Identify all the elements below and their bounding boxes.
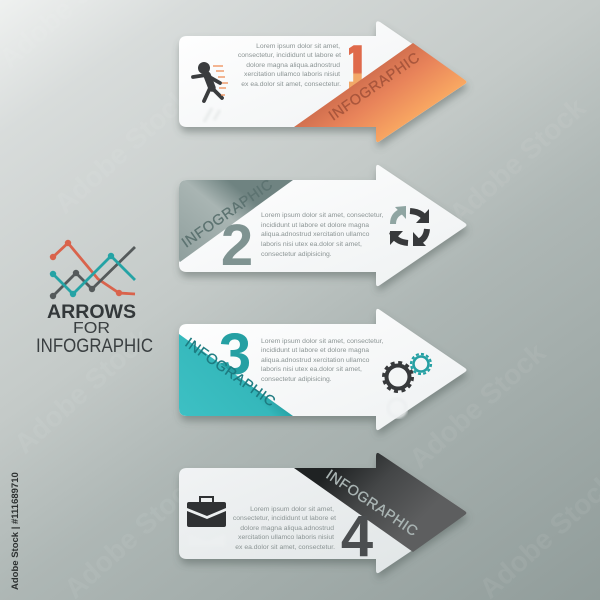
text block: xercitation ullamco laboris nisiut [244, 71, 340, 78]
number 3: 3 [219, 322, 251, 387]
icon: line chart [50, 240, 135, 299]
arrow shape [179, 21, 466, 142]
text block: dolore magna aliqua.adnostrud [240, 525, 334, 532]
logo: arrows for infographic: FOR [73, 320, 110, 337]
text block: Lorem ipsum dolor sit amet, [256, 43, 340, 50]
arrow shape [179, 165, 466, 286]
panel: arrow 2 [179, 165, 466, 286]
arrow shape [179, 309, 466, 430]
logo: arrows for infographic [36, 240, 153, 357]
text block: dolore magna aliqua.adnostrud [246, 62, 340, 69]
text block: consectetur, incididunt ut labore et [238, 52, 341, 59]
text block: ex ea.dolor sit amet, consectetur. [235, 544, 335, 551]
arrow shape [179, 453, 466, 573]
fold label: INFOGRAPHIC [323, 467, 421, 540]
grey fold [179, 180, 293, 262]
watermark: Adobe Stock [8, 322, 157, 459]
text block: consectetur, incididunt ut labore et [233, 515, 336, 522]
orange fold [294, 43, 466, 142]
text block: Lorem ipsum dolor sit amet, consectetur, [261, 212, 384, 219]
text block: incididunt ut labore et dolore magna [261, 347, 369, 354]
side credit: Adobe Stock | #111689710 [10, 472, 21, 590]
icon: running man [193, 62, 228, 122]
watermark: Adobe Stock [403, 337, 552, 474]
fold label: INFOGRAPHIC [179, 177, 276, 251]
text block: laboris nisi utex ea.dolor sit amet, [261, 366, 362, 373]
text block: ex ea.dolor sit amet, consectetur. [241, 81, 341, 88]
text block [261, 212, 384, 258]
text block: aliqua.adnostrud xercitation ullamco [261, 357, 370, 364]
text block: Lorem ipsum dolor sit amet, consectetur, [261, 338, 384, 345]
text block: xercitation ullamco laboris nisiut [238, 534, 334, 541]
heading: ARROWS [47, 301, 136, 323]
icon: cycle arrows [390, 206, 429, 246]
text block: consectetur adipisicing. [261, 251, 332, 258]
text block [233, 506, 336, 551]
number 2: 2 [221, 213, 253, 278]
number 1: 1 [339, 33, 373, 102]
text block: incididunt ut labore et dolore magna [261, 222, 369, 229]
watermark: Adobe Stock [48, 82, 197, 219]
icon: briefcase [187, 497, 226, 546]
panel: arrow 1 [179, 21, 466, 142]
icon: gears [384, 354, 431, 417]
text block: consectetur adipisicing. [261, 376, 332, 383]
number 4: 4 [341, 504, 373, 569]
fold label: INFOGRAPHIC [182, 335, 278, 411]
panel: arrow 4 [179, 453, 466, 573]
fold label: INFOGRAPHIC [326, 50, 423, 124]
text block: aliqua.adnostrud xercitation ullamco [261, 231, 370, 238]
text block [261, 338, 384, 383]
dark fold [294, 453, 466, 552]
panel: arrow 3 [179, 309, 466, 430]
teal fold [179, 334, 293, 416]
text block: Lorem ipsum dolor sit amet, [250, 506, 334, 513]
logo: arrows for infographic: INFOGRAPHIC [36, 336, 153, 357]
text block: laboris nisi utex ea.dolor sit amet, [261, 241, 362, 248]
watermark: Adobe Stock [443, 92, 592, 229]
text block [238, 43, 341, 88]
